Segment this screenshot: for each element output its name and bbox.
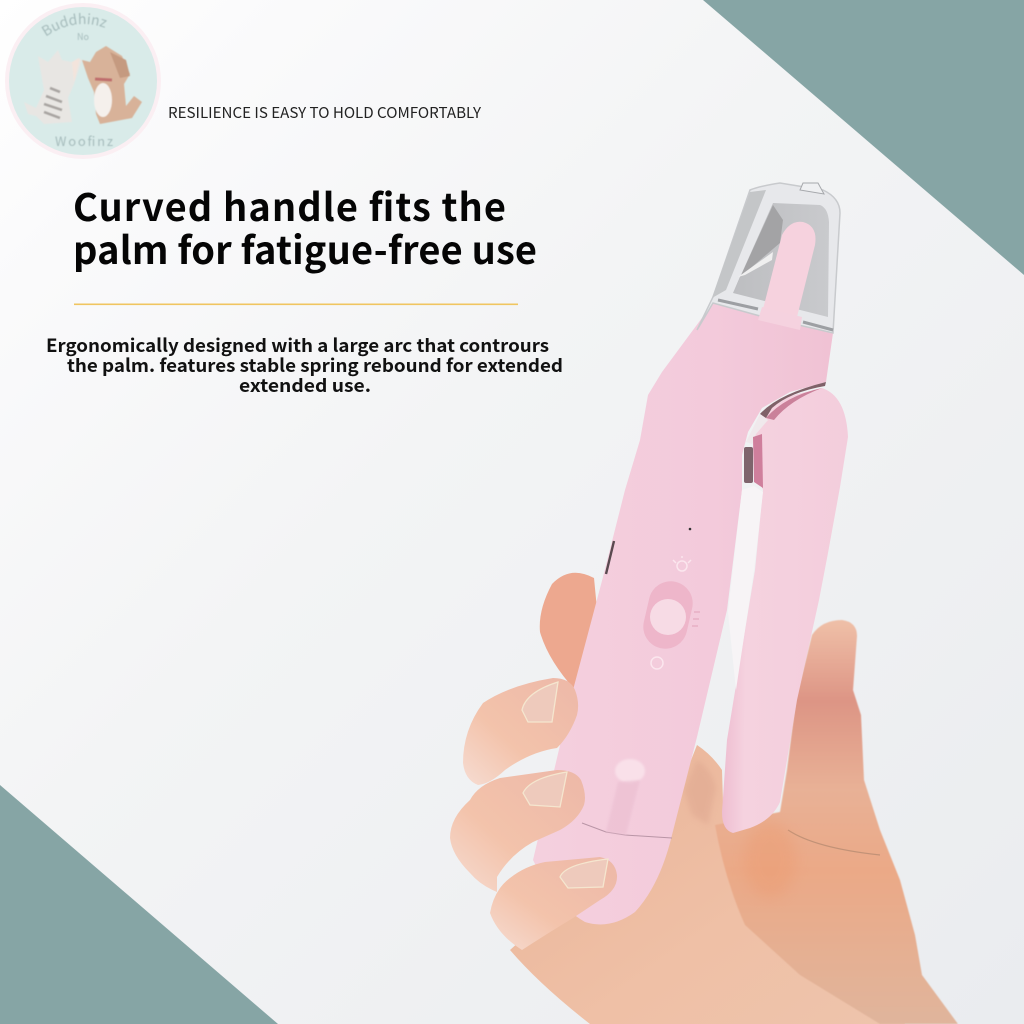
logo badge: cat and dog high five bbox=[5, 3, 161, 159]
icon: paw bbox=[651, 657, 663, 669]
switch slot bbox=[639, 577, 697, 653]
dark pivot arc bbox=[760, 382, 826, 418]
guard tab bbox=[800, 183, 824, 194]
silver hinge plate bbox=[746, 414, 768, 444]
red shadow under arc bbox=[766, 388, 822, 420]
heading: Curved handle fits the bbox=[73, 177, 506, 232]
indicator slot bbox=[606, 541, 614, 574]
clipper lower arm bbox=[533, 303, 833, 924]
logo cat bbox=[24, 50, 82, 124]
finger 2 bbox=[450, 770, 585, 892]
pink pin bbox=[762, 222, 816, 317]
dark metal hinge bbox=[744, 447, 753, 483]
logo middle text: No bbox=[77, 30, 89, 43]
clipper upper handle bbox=[722, 382, 848, 833]
icon: light bbox=[673, 556, 691, 571]
finger 1 bbox=[463, 678, 578, 785]
palm fold shading bbox=[684, 760, 716, 825]
logo top text: Buddhinz bbox=[42, 12, 107, 36]
red inner hinge bbox=[753, 434, 763, 488]
logo bottom text: Woofinz bbox=[55, 131, 113, 150]
guard side band bbox=[712, 190, 766, 298]
hand: palm bbox=[510, 745, 905, 1024]
hand: thumb and base bbox=[715, 620, 958, 1024]
nail 2 bbox=[523, 772, 567, 807]
body text: extended use. bbox=[239, 372, 371, 398]
heading bbox=[73, 177, 537, 275]
eyebrow text: RESILIENCE IS EASY TO HOLD COMFORTABLY bbox=[168, 102, 481, 123]
divider bbox=[74, 304, 518, 305]
body text: Ergonomically designed with a large arc that contrours bbox=[46, 332, 549, 358]
guard bottom edge bbox=[718, 300, 833, 330]
rivet shadow bbox=[606, 780, 640, 835]
finger 3 bbox=[490, 857, 617, 950]
logo dog bbox=[82, 46, 142, 124]
transparent blade guard bbox=[697, 183, 840, 333]
guard window bbox=[733, 203, 829, 317]
indicator dot bbox=[689, 528, 691, 530]
body text: the palm. features stable spring rebound for extended bbox=[67, 352, 563, 378]
thumb red glow bbox=[744, 822, 796, 898]
lower cap seam bbox=[582, 823, 672, 838]
rivet button bbox=[615, 759, 645, 783]
dark blade edge bbox=[733, 205, 783, 293]
white strip between arms bbox=[728, 486, 763, 690]
switch knob bbox=[650, 599, 686, 635]
pink clasp bbox=[758, 307, 802, 330]
thumb crease bbox=[788, 830, 880, 855]
teal corner: top right bbox=[703, 0, 1024, 275]
heading: palm for fatigue-free use bbox=[73, 220, 537, 275]
teal corner: bottom left bbox=[0, 785, 278, 1024]
nail 1 bbox=[522, 682, 558, 722]
body text bbox=[46, 332, 563, 398]
finger behind the clipper bbox=[540, 573, 600, 700]
icon: speed marks bbox=[692, 612, 700, 626]
nail 3 bbox=[560, 859, 608, 888]
white bevel bbox=[738, 252, 773, 277]
